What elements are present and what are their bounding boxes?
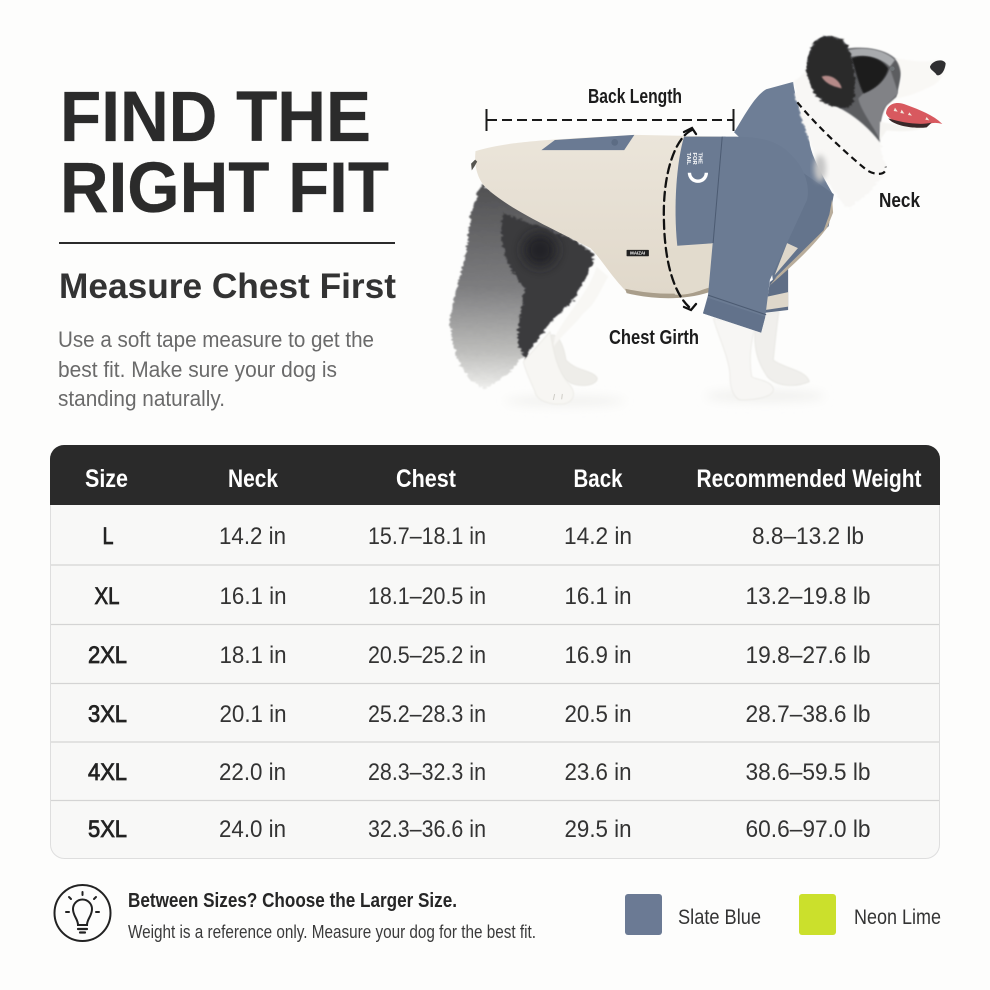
colour swatch: neon lime: Neon Lime: [854, 906, 941, 929]
size table: [50, 445, 940, 858]
tip text: [128, 890, 536, 942]
table header: Recommended Weight: [696, 465, 922, 493]
row 2XL: 20.5–25.2 in: [368, 642, 486, 669]
subheading: Measure Chest First: [59, 267, 396, 306]
row 4XL: [88, 759, 870, 786]
logo: FOR: [691, 152, 697, 165]
row 5XL: 29.5 in: [564, 816, 632, 843]
label: back length: Back Length: [588, 86, 682, 108]
title: [60, 78, 389, 228]
table header: Size: [85, 465, 128, 493]
eye patch: [852, 56, 888, 93]
row 2XL: 19.8–27.6 lb: [746, 642, 870, 669]
row XL: 13.2–19.8 lb: [746, 583, 870, 610]
sleeve and shoulder: [703, 137, 808, 333]
table header: Chest: [396, 465, 457, 493]
nose: [930, 60, 946, 75]
row 4XL: 23.6 in: [564, 759, 632, 786]
chest girth dashes: [664, 128, 696, 310]
intro text: [58, 327, 374, 411]
row 5XL: 5XL: [88, 816, 127, 843]
row 5XL: 60.6–97.0 lb: [746, 816, 870, 843]
far front leg: [755, 312, 809, 385]
row 4XL: 38.6–59.5 lb: [746, 759, 870, 786]
logo: TAIL: [685, 152, 691, 165]
row 4XL: 28.3–32.3 in: [368, 759, 486, 786]
brand tag: MAIZAI: [630, 251, 645, 256]
row 3XL: 20.1 in: [220, 701, 286, 728]
table header: [85, 465, 922, 493]
colour swatch: slate blue: Slate Blue: [678, 906, 761, 929]
pocket flap: [541, 135, 634, 150]
coat hem: [625, 288, 709, 298]
hem panel: [661, 243, 714, 295]
row 5XL: [88, 816, 870, 843]
row 2XL: 16.9 in: [564, 642, 632, 669]
mouth and tongue: [886, 103, 942, 127]
logo: [685, 152, 703, 165]
row L: L: [102, 523, 114, 550]
hindquarters and tail: [450, 185, 608, 404]
row L: 15.7–18.1 in: [368, 523, 486, 550]
row L: [102, 523, 864, 550]
head base: [807, 36, 903, 142]
table header: Back: [574, 465, 623, 493]
dog wearing coat illustration: [450, 36, 946, 406]
ground shadow: [505, 390, 825, 406]
row 4XL: 22.0 in: [219, 759, 286, 786]
torso side panel: [764, 155, 834, 280]
row L: 14.2 in: [564, 523, 632, 550]
label: neck: Neck: [879, 190, 921, 212]
row L: 8.8–13.2 lb: [752, 523, 864, 550]
row 3XL: [88, 701, 870, 728]
zip placket: [770, 199, 833, 285]
table header: Neck: [228, 465, 278, 493]
row 3XL: 3XL: [88, 701, 127, 728]
black ear fur: [806, 36, 855, 108]
white thigh fur: [553, 267, 608, 347]
row 5XL: 32.3–36.6 in: [368, 816, 486, 843]
title: RIGHT FIT: [60, 149, 389, 228]
gray head top: [848, 48, 895, 67]
row XL: XL: [94, 583, 120, 610]
icon: light bulb: [54, 885, 110, 941]
row XL: [94, 583, 870, 610]
intro text: standing naturally.: [58, 386, 225, 411]
lower jaw: [880, 122, 930, 140]
colour swatch: slate blue: [625, 894, 761, 935]
row 4XL: 4XL: [88, 759, 127, 786]
far hind leg: [548, 335, 597, 386]
title: FIND THE: [60, 78, 371, 157]
merle cheek: [858, 68, 898, 138]
tip text: Weight is a reference only. Measure your dog for the best fit.: [128, 922, 536, 942]
logo: THE: [697, 152, 703, 164]
hood: [734, 82, 834, 223]
row 3XL: 28.7–38.6 lb: [746, 701, 870, 728]
chest panel: [676, 137, 726, 246]
row 5XL: 24.0 in: [219, 816, 286, 843]
tail fur: [450, 185, 593, 388]
intro text: best fit. Make sure your dog is: [58, 357, 337, 382]
front legs: [713, 312, 809, 400]
head and neck: [793, 36, 946, 208]
tip text: Between Sizes? Choose the Larger Size.: [128, 890, 457, 912]
row XL: 16.1 in: [220, 583, 286, 610]
far sleeve: [765, 268, 788, 313]
row XL: 18.1–20.5 in: [368, 583, 486, 610]
row 2XL: 2XL: [88, 642, 127, 669]
neck fur: [793, 68, 886, 208]
label: chest girth: Chest Girth: [609, 327, 699, 349]
row 3XL: 20.5 in: [564, 701, 632, 728]
back length arrow: [486, 109, 734, 131]
intro text: Use a soft tape measure to get the: [58, 327, 374, 352]
row 2XL: [88, 642, 870, 669]
row 2XL: 18.1 in: [220, 642, 286, 669]
near front leg: [713, 318, 773, 400]
brand tag: [627, 250, 649, 256]
pink inner ear: [822, 76, 842, 88]
dark haunch: [502, 213, 594, 360]
row 3XL: 25.2–28.3 in: [368, 701, 486, 728]
near hind leg: [523, 332, 574, 404]
row L: 14.2 in: [219, 523, 286, 550]
muzzle: [895, 58, 946, 98]
coat body: [475, 135, 726, 297]
colour swatch: neon lime: [799, 894, 941, 935]
row XL: 16.1 in: [564, 583, 632, 610]
neck dashes: [797, 102, 886, 174]
